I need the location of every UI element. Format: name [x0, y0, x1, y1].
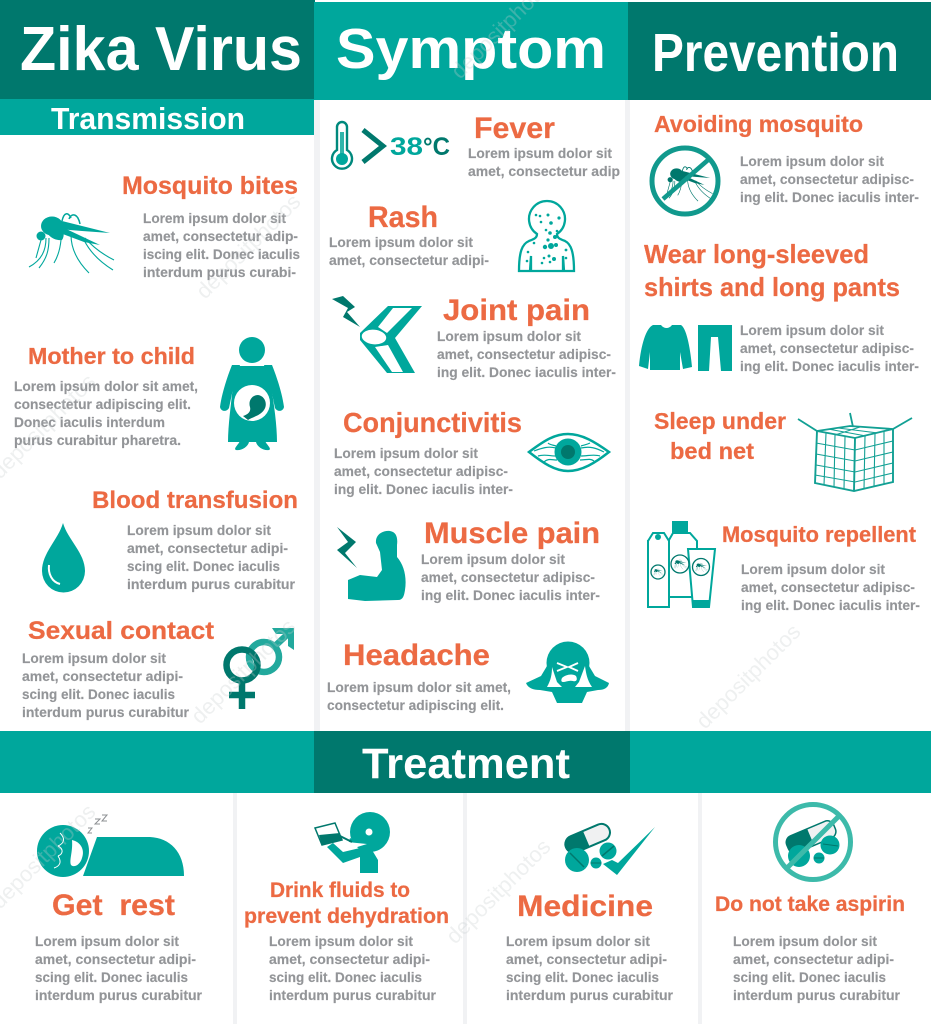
heading: Get rest: Get rest [52, 889, 175, 922]
header: Prevention [628, 2, 931, 100]
text: medicine [506, 934, 674, 1003]
text: long clothes [740, 323, 919, 374]
text: conjunctivitis: amet, consectetur adipisc- [334, 464, 508, 479]
text: avoiding mosquito [740, 154, 919, 205]
text: do not take aspirin: scing elit. Donec iaculis [733, 970, 886, 985]
text: drink fluids: Lorem ipsum dolor sit [269, 934, 414, 949]
icon: no aspirin sign [776, 804, 850, 880]
text: blood transfusion: scing elit. Donec iaculis [127, 559, 280, 574]
heading: Headache: Headache [343, 639, 490, 672]
text: drink fluids: amet, consectetur adipi- [269, 952, 430, 967]
heading: Mother to child: Mother to child [28, 343, 195, 369]
heading: Wear long-sleeved shirts and long pants [644, 239, 900, 302]
text: mosquito repellent [741, 562, 920, 613]
text: mosquito bites [143, 211, 300, 280]
text: avoiding mosquito: amet, consectetur adipisc- [740, 172, 914, 187]
text: mosquito repellent: Lorem ipsum dolor sit [741, 562, 886, 577]
text: muscle pain: amet, consectetur adipisc- [421, 570, 595, 585]
text: drink fluids: scing elit. Donec iaculis [269, 970, 422, 985]
text: joint pain: Lorem ipsum dolor sit [437, 329, 582, 344]
header: Symptom [314, 2, 628, 100]
text: muscle pain: Lorem ipsum dolor sit [421, 552, 566, 567]
text: avoiding mosquito: ing elit. Donec iaculis inter- [740, 190, 919, 205]
icon: thermometer above 38 degrees: °C [423, 133, 450, 161]
header: Symptom: Symptom [336, 17, 606, 81]
text: do not take aspirin: interdum purus curabitur [733, 988, 901, 1003]
heading: Sleep under bed net: bed net [670, 438, 754, 464]
heading: Wear long-sleeved shirts and long pants: shirts and long pants [644, 272, 900, 302]
text: conjunctivitis: Lorem ipsum dolor sit [334, 446, 479, 461]
text: mosquito bites: Lorem ipsum dolor sit [143, 211, 287, 226]
text: muscle pain: ing elit. Donec iaculis inter- [421, 588, 600, 603]
text: drink fluids [269, 934, 437, 1003]
text: mother to child: purus curabitur pharetra. [14, 433, 181, 448]
icon: gender symbols [226, 628, 294, 709]
band: Treatment [0, 731, 931, 793]
text: medicine: scing elit. Donec iaculis [506, 970, 659, 985]
header: Zika Virus title: Zika Virus [20, 15, 302, 84]
watermark: depositphotos [441, 834, 555, 949]
sub-header: Transmission: Transmission [51, 101, 245, 136]
icon: bed net [798, 413, 912, 491]
heading: Muscle pain: Muscle pain [424, 517, 600, 550]
heading: Rash: Rash [368, 201, 438, 234]
text: fever: amet, consectetur adip [468, 164, 620, 179]
icon: medicine pills and check mark [563, 821, 655, 875]
heading: Wear long-sleeved shirts and long pants: Wear long-sleeved [644, 239, 869, 269]
watermark: depositphotos [186, 614, 300, 729]
heading: Do not take aspirin: Do not take aspirin [715, 893, 905, 916]
text: mosquito bites: iscing elit. Donec iaculis [143, 247, 300, 262]
text: blood transfusion: interdum purus curabitur [127, 577, 296, 592]
icon: person drinking [315, 812, 390, 873]
text: blood transfusion: amet, consectetur adipi- [127, 541, 288, 556]
icon: mosquito [29, 214, 114, 273]
text: rash [329, 235, 489, 268]
panel: transmission [14, 172, 300, 720]
text: long clothes: Lorem ipsum dolor sit [740, 323, 885, 338]
header: Prevention: Prevention [652, 23, 899, 83]
header: Zika Virus title [0, 0, 315, 99]
text: muscle pain [421, 552, 600, 603]
text: sexual contact [22, 651, 190, 720]
text: get rest [35, 934, 203, 1003]
text: conjunctivitis [334, 446, 513, 497]
panel dividers [233, 100, 702, 1024]
text: medicine: interdum purus curabitur [506, 988, 674, 1003]
heading: Fever: Fever [474, 112, 555, 145]
text: get rest: amet, consectetur adipi- [35, 952, 196, 967]
text: mother to child: Donec iaculis interdum [14, 415, 165, 430]
text: headache: consectetur adipiscing elit. [327, 698, 504, 713]
text: get rest: scing elit. Donec iaculis [35, 970, 188, 985]
text: rash: Lorem ipsum dolor sit [329, 235, 474, 250]
text: do not take aspirin [733, 934, 901, 1003]
text: fever [468, 146, 620, 179]
heading: Medicine: Medicine [517, 890, 653, 923]
panel: prevention [639, 111, 920, 613]
panel: treatment [35, 804, 905, 1003]
panel: symptoms [327, 112, 620, 713]
text: get rest: Lorem ipsum dolor sit [35, 934, 180, 949]
text: rash: amet, consectetur adipi- [329, 253, 489, 268]
text: joint pain: ing elit. Donec iaculis inter- [437, 365, 616, 380]
icon: pregnant mother [220, 337, 284, 450]
icon: headache person [526, 642, 609, 703]
icon: red eye [529, 434, 609, 471]
text: joint pain: amet, consectetur adipisc- [437, 347, 611, 362]
text: mother to child: Lorem ipsum dolor sit amet, [14, 379, 198, 394]
heading: Mosquito repellent: Mosquito repellent [722, 522, 917, 547]
text: mosquito repellent: amet, consectetur adipisc- [741, 580, 915, 595]
text: conjunctivitis: ing elit. Donec iaculis inter- [334, 482, 513, 497]
icon: no mosquito sign [652, 148, 718, 214]
heading: Joint pain: Joint pain [443, 294, 590, 327]
heading: Sleep under bed net: Sleep under [654, 408, 786, 434]
text: joint pain [437, 329, 616, 380]
text: do not take aspirin: amet, consectetur adipi- [733, 952, 894, 967]
text: sexual contact: interdum purus curabitur [22, 705, 190, 720]
text: blood transfusion [127, 523, 296, 592]
text: headache: Lorem ipsum dolor sit amet, [327, 680, 511, 695]
text: do not take aspirin: Lorem ipsum dolor sit [733, 934, 878, 949]
heading: Mosquito bites: Mosquito bites [122, 172, 298, 200]
watermark: depositphotos [691, 619, 805, 734]
icon: blood drop [42, 523, 85, 592]
icon: repellent bottles [648, 521, 715, 607]
heading: Drink fluids to prevent dehydration: Drink fluids to [270, 879, 410, 902]
icon: thermometer above 38 degrees: 38 [390, 133, 423, 161]
text: sexual contact: scing elit. Donec iaculis [22, 687, 175, 702]
text: sexual contact: Lorem ipsum dolor sit [22, 651, 167, 666]
band: Treatment: Treatment [362, 740, 570, 788]
text: blood transfusion: Lorem ipsum dolor sit [127, 523, 272, 538]
text: avoiding mosquito: Lorem ipsum dolor sit [740, 154, 885, 169]
icon: muscle pain arm [337, 527, 406, 601]
text: headache [327, 680, 511, 713]
heading: Drink fluids to prevent dehydration [244, 879, 449, 928]
icon: person sleeping [37, 815, 184, 877]
heading: Blood transfusion: Blood transfusion [92, 487, 298, 514]
heading: Sexual contact: Sexual contact [28, 617, 215, 645]
text: medicine: amet, consectetur adipi- [506, 952, 667, 967]
text: long clothes: ing elit. Donec iaculis inter- [740, 359, 919, 374]
text: long clothes: amet, consectetur adipisc- [740, 341, 914, 356]
text: mother to child: consectetur adipiscing elit. [14, 397, 191, 412]
heading: Conjunctivitis: Conjunctivitis [343, 407, 522, 438]
heading: Sleep under bed net [654, 408, 786, 464]
icon: knee joint pain [332, 296, 422, 373]
text: mother to child [14, 379, 198, 448]
icon: child with rash [519, 201, 574, 271]
text: mosquito bites: amet, consectetur adip- [143, 229, 298, 244]
text: mosquito bites: interdum purus curabi- [143, 265, 296, 280]
text: drink fluids: interdum purus curabitur [269, 988, 437, 1003]
text: fever: Lorem ipsum dolor sit [468, 146, 613, 161]
sub-header: Transmission [0, 99, 314, 136]
text: sexual contact: amet, consectetur adipi- [22, 669, 183, 684]
watermark: depositphotos [191, 189, 305, 304]
heading: Avoiding mosquito: Avoiding mosquito [654, 111, 863, 137]
text: get rest: interdum purus curabitur [35, 988, 203, 1003]
text: mosquito repellent: ing elit. Donec iaculis inter- [741, 598, 920, 613]
icon: thermometer above 38 degrees [332, 122, 450, 169]
heading: Drink fluids to prevent dehydration: prevent dehydration [244, 905, 449, 928]
text: medicine: Lorem ipsum dolor sit [506, 934, 651, 949]
icon: shirt and pants [639, 325, 732, 371]
